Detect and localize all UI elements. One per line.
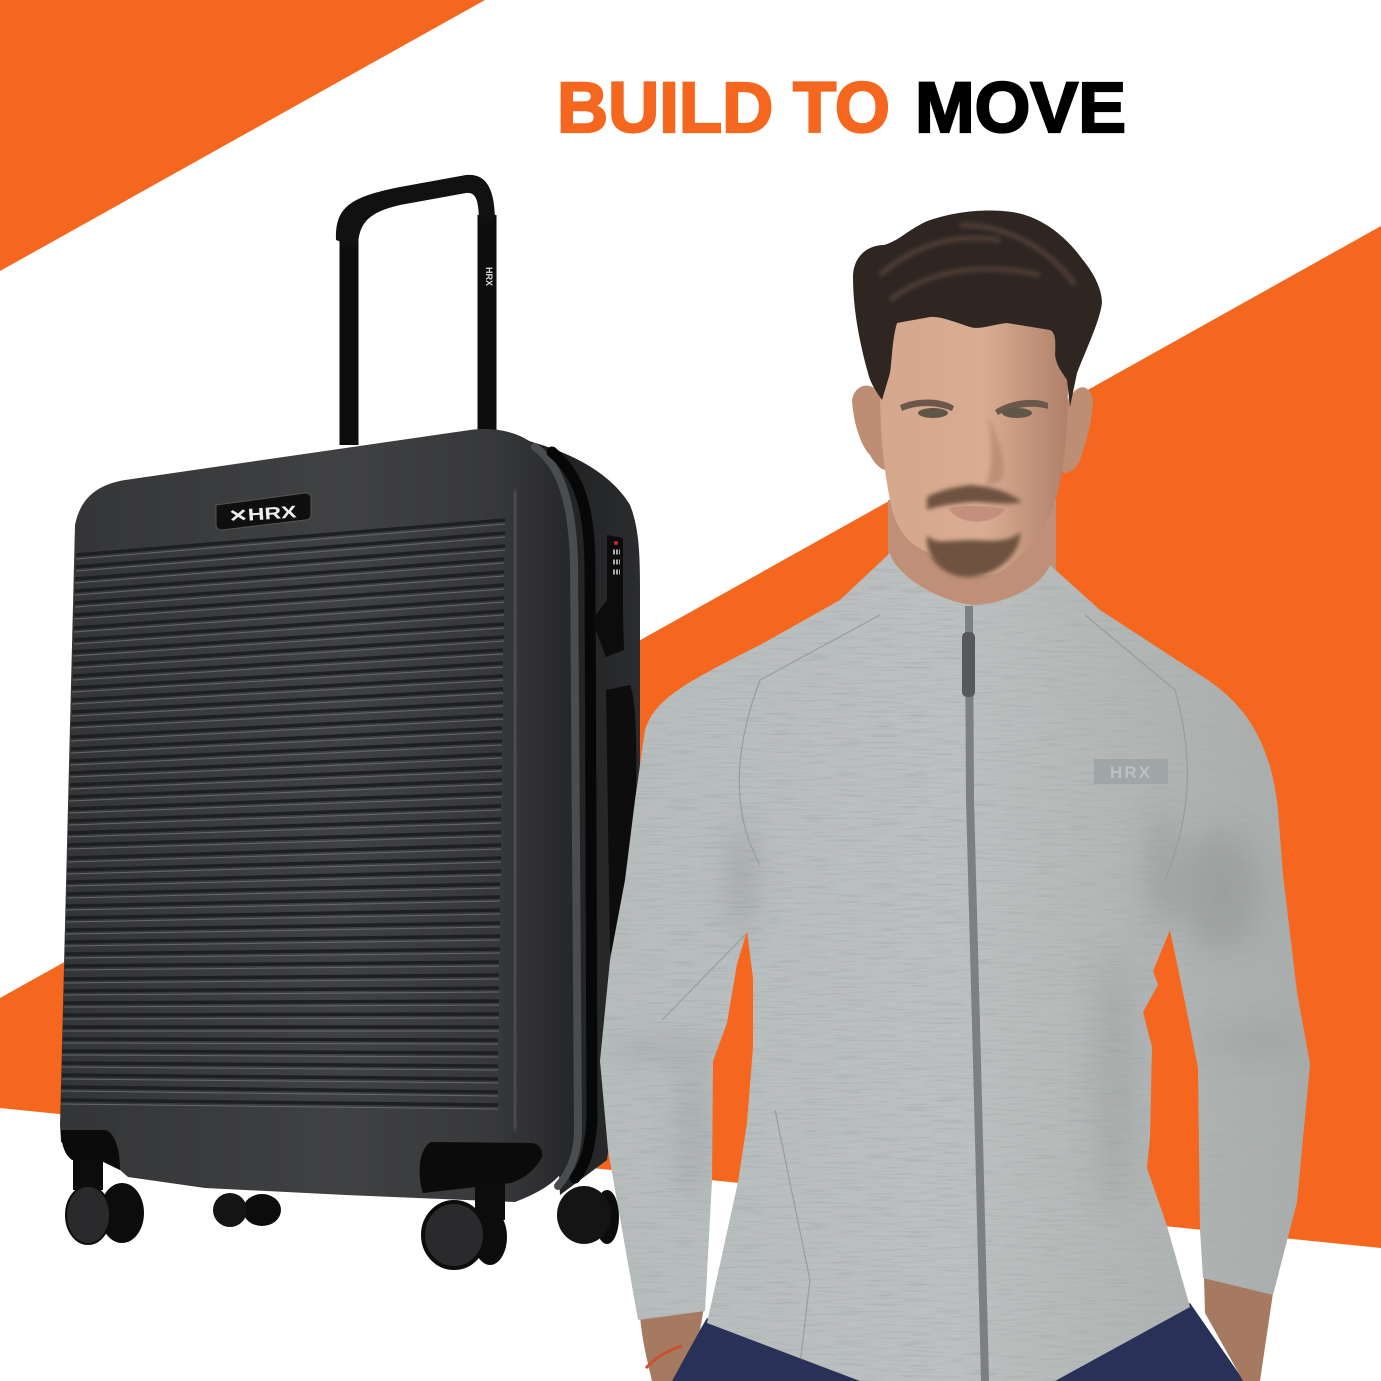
wrist thread	[646, 1346, 682, 1368]
suitcase	[60, 175, 640, 1268]
title: BUILD TO	[557, 69, 890, 148]
suitcase seam	[535, 447, 592, 1186]
suitcase side panel	[525, 440, 640, 1195]
jacket zipper	[969, 606, 985, 1381]
jacket chest logo: HRX	[1110, 763, 1152, 782]
hands	[640, 1278, 1273, 1381]
zipper pull	[962, 632, 975, 697]
suitcase front shell	[60, 429, 575, 1202]
suitcase combination lock	[592, 535, 624, 657]
suitcase logo badge	[216, 493, 311, 530]
background: top-left orange triangle	[0, 0, 485, 271]
nose shadow	[985, 420, 1004, 487]
jacket raglan seams	[662, 615, 1187, 1365]
face	[880, 300, 1068, 576]
background: orange diagonal band	[0, 226, 1381, 1248]
lips	[948, 506, 1005, 522]
title: MOVE	[915, 69, 1126, 148]
jacket shading	[656, 826, 1259, 1179]
trousers	[670, 1303, 1244, 1381]
jacket	[590, 550, 1320, 1381]
eyes and brows	[900, 400, 1048, 418]
suitcase ribs	[61, 520, 505, 1109]
hair	[853, 210, 1102, 407]
suitcase handle: HRX	[484, 267, 494, 286]
suitcase shell highlight	[514, 490, 516, 1130]
ears	[852, 386, 1093, 473]
neck	[888, 500, 1056, 612]
suitcase logo badge: ✕HRX	[228, 502, 298, 526]
title	[557, 69, 1126, 148]
suitcase handle	[336, 175, 495, 445]
wheels	[66, 1160, 619, 1268]
person	[590, 210, 1320, 1381]
suitcase side handle	[606, 685, 636, 955]
jacket chest logo	[1094, 759, 1168, 784]
suitcase bottom corner guards	[61, 1130, 542, 1193]
beard	[927, 485, 1022, 577]
